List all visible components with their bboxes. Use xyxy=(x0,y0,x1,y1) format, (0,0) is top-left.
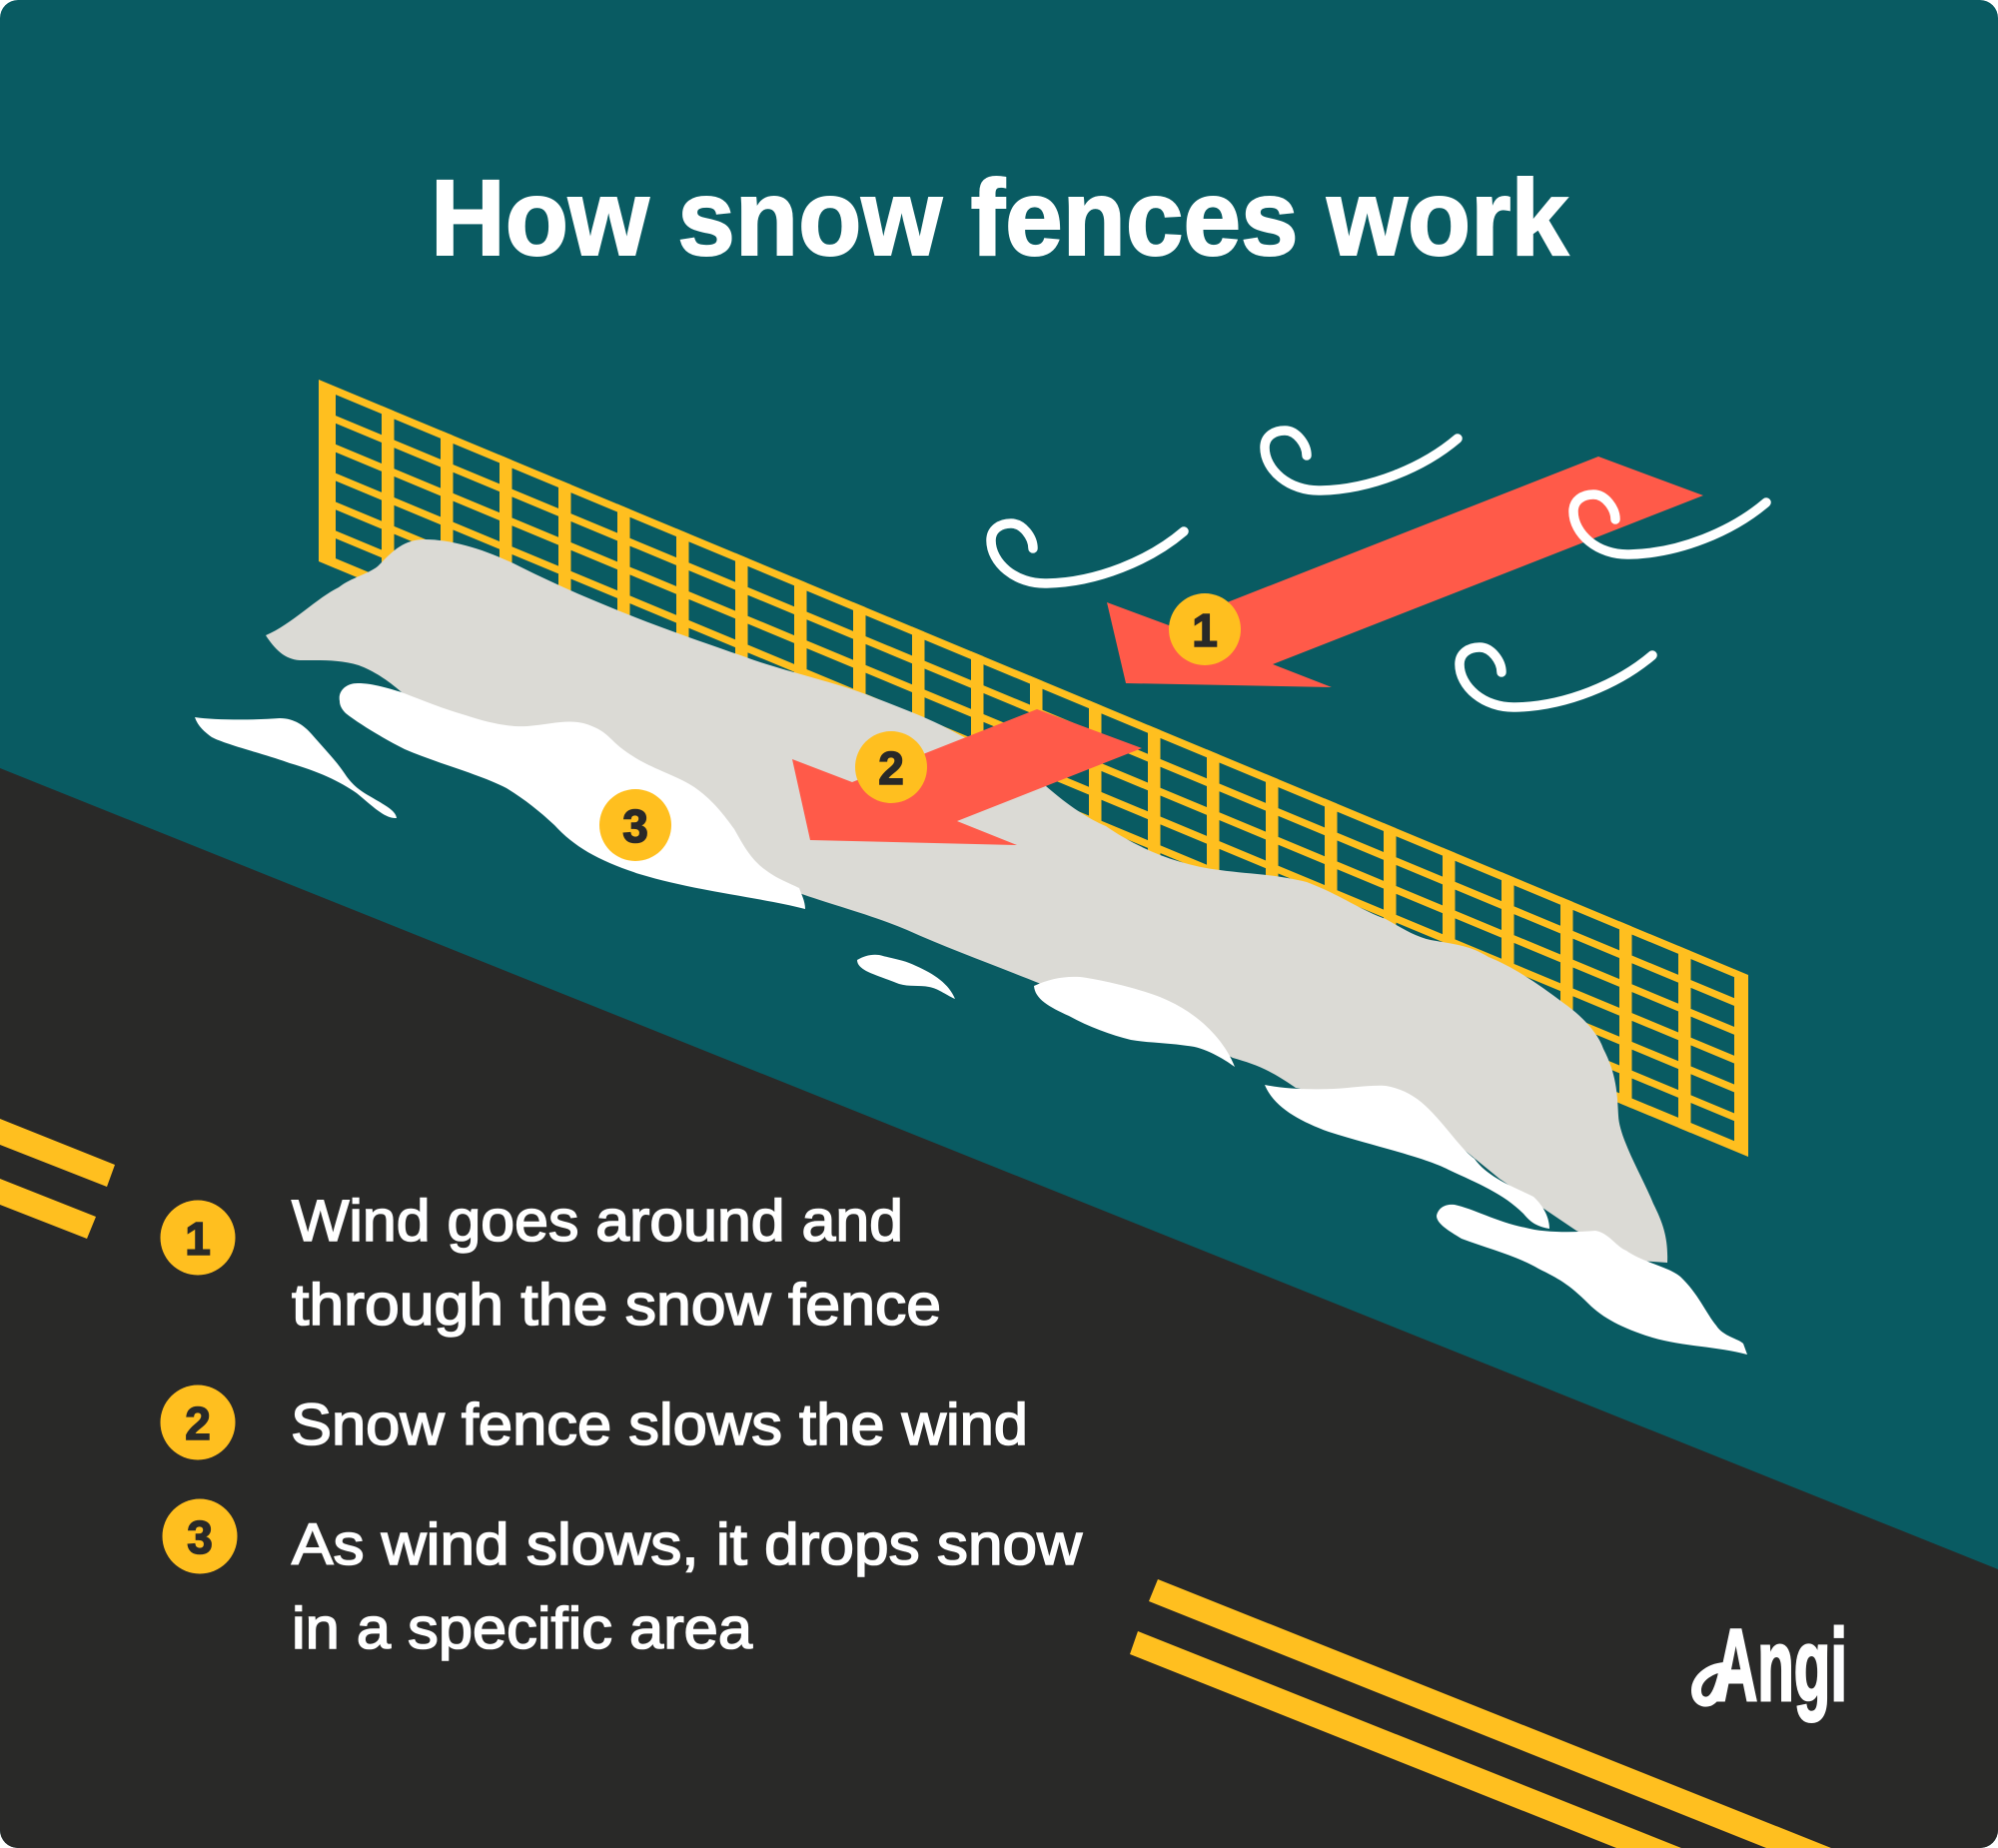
icon: wind swirl top xyxy=(1265,431,1458,490)
legend step 1: through the snow fence xyxy=(292,1273,941,1338)
legend step 1: 1 xyxy=(185,1213,211,1265)
legend step 2: Snow fence slows the wind xyxy=(291,1392,1028,1457)
icon: wind swirl right xyxy=(1573,494,1766,554)
legend step 2: 2 xyxy=(185,1397,211,1449)
fence grid xyxy=(319,380,1748,1157)
snow drift behind fence xyxy=(266,539,1667,1263)
legend step 1: Wind goes around and xyxy=(292,1189,903,1254)
arrow: wind 1 xyxy=(1107,457,1703,687)
title: How snow fences work xyxy=(431,157,1569,278)
marker 3 on snow xyxy=(599,789,671,861)
marker 1 on arrow xyxy=(1169,593,1241,665)
marker 2 on arrow xyxy=(855,731,927,803)
Angi logo xyxy=(1696,1608,1847,1722)
arrow: wind 2 xyxy=(792,709,1142,845)
legend step 3: As wind slows, it drops snow xyxy=(292,1512,1083,1577)
marker 2 on arrow: 2 xyxy=(878,742,904,794)
legend step 3: 3 xyxy=(187,1511,213,1563)
icon: wind swirl left xyxy=(991,523,1184,583)
marker 3 on snow: 3 xyxy=(622,800,648,852)
white snow patches xyxy=(195,683,1747,1355)
Angi logo: Angi xyxy=(1714,1608,1847,1722)
legend step 3 xyxy=(162,1498,1083,1661)
legend step 1 xyxy=(160,1189,941,1338)
legend step 3: in a specific area xyxy=(292,1596,753,1661)
icon: wind swirl bottom xyxy=(1460,647,1652,707)
legend step 2 xyxy=(160,1385,1028,1460)
marker 1 on arrow: 1 xyxy=(1192,604,1218,656)
